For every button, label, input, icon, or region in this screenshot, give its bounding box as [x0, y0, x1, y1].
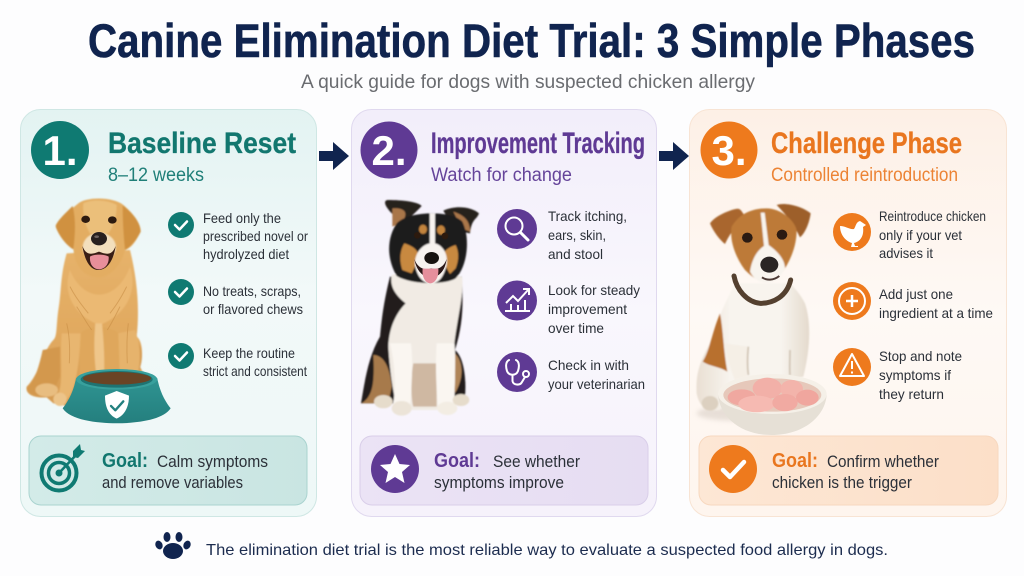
tracking item: check with veterinarian: your veterinarian	[548, 376, 645, 392]
tracking item: itching, ears, skin, stool	[497, 208, 627, 262]
icon: plus in ring	[839, 288, 865, 314]
icon: star badge	[371, 445, 419, 493]
panel: phase 3 challenge phase	[690, 110, 1006, 516]
tracking item: itching, ears, skin, stool: Track itching,	[548, 208, 627, 224]
tracking item: check with veterinarian: Check in with	[548, 357, 629, 373]
checklist item: feed only prescribed diet: Feed only the	[203, 210, 281, 226]
phase 1 number badge: 1.	[42, 127, 78, 174]
kibble bowl with shield	[63, 369, 171, 423]
checklist item: feed only prescribed diet	[168, 210, 308, 262]
arrow: phase 2 to 3	[659, 142, 689, 170]
phase 3 subheading: Controlled reintroduction	[771, 165, 958, 186]
tracking item: steady improvement: over time	[548, 320, 604, 336]
phase 2 heading: Improvement Tracking	[431, 127, 645, 160]
goal text: phase 1	[102, 450, 268, 492]
phase 2 subheading: Watch for change	[431, 165, 572, 186]
challenge item: one ingredient	[833, 282, 993, 321]
goal text: phase 1: and remove variables	[102, 474, 243, 492]
collar	[734, 276, 791, 303]
checklist item: no treats: or flavored chews	[203, 301, 303, 317]
tracking item: steady improvement	[497, 280, 640, 336]
challenge item: one ingredient: Add just one	[879, 286, 953, 302]
goal box: phase 2	[360, 436, 648, 505]
goal box: phase 3	[699, 436, 998, 505]
subtitle: A quick guide for dogs with suspected chicken allergy	[301, 71, 755, 93]
illustration: tricolor shepherd dog	[361, 200, 479, 416]
challenge item: reintroduce chicken	[833, 208, 986, 261]
tracking item: check with veterinarian	[497, 352, 645, 392]
checklist item: keep routine	[168, 343, 307, 379]
illustration: golden retriever	[26, 199, 171, 423]
goal text: phase 1: Calm symptoms	[157, 453, 268, 471]
checklist item: keep routine: Keep the routine	[203, 345, 295, 361]
challenge item: stop and note symptoms: symptoms if	[879, 367, 951, 383]
icon: target with arrow	[42, 444, 85, 490]
checklist item: feed only prescribed diet: hydrolyzed diet	[203, 246, 289, 262]
icon: rising chart	[505, 289, 530, 311]
challenge item: stop and note symptoms	[833, 348, 962, 402]
panel: phase 2 improvement tracking	[352, 110, 656, 516]
phase 2 number badge	[360, 122, 418, 178]
tracking item: itching, ears, skin, stool: ears, skin,	[548, 227, 606, 243]
phase 3 heading: Challenge Phase	[771, 127, 962, 160]
challenge item: stop and note symptoms: they return	[879, 386, 944, 402]
checklist item: no treats	[168, 279, 303, 317]
goal text: phase 3	[772, 450, 939, 492]
bowl of raw chicken	[718, 374, 827, 435]
challenge item: reintroduce chicken: Reintroduce chicken	[879, 208, 986, 224]
goal box: phase 1	[29, 436, 307, 505]
arrow: phase 1 to 2	[319, 142, 349, 170]
goal text: phase 3: Confirm whether	[827, 453, 939, 471]
goal text: phase 2: See whether	[493, 453, 580, 471]
checklist item: feed only prescribed diet: prescribed novel or	[203, 228, 308, 244]
goal text: phase 2: Goal:	[434, 450, 480, 472]
icon: warning triangle	[840, 354, 864, 376]
goal text: phase 1: Goal:	[102, 450, 148, 472]
icon: magnifier	[506, 218, 528, 240]
tracking item: steady improvement: Look for steady	[548, 282, 640, 298]
icon: check badge	[709, 445, 757, 493]
goal text: phase 2: symptoms improve	[434, 474, 564, 492]
phase 1 subheading: 8–12 weeks	[108, 165, 204, 186]
challenge item: one ingredient: ingredient at a time	[879, 305, 993, 321]
challenge item: reintroduce chicken: only if your vet	[879, 227, 962, 243]
icon: stethoscope	[506, 360, 529, 385]
phase 3 number badge	[700, 122, 758, 178]
goal text: phase 2	[434, 450, 580, 492]
goal text: phase 3: Goal:	[772, 450, 818, 472]
panel: phase 1 baseline reset	[20, 110, 316, 516]
phase 2 number badge: 2.	[371, 127, 407, 174]
challenge item: stop and note symptoms: Stop and note	[879, 348, 962, 364]
icon: chicken	[840, 221, 866, 247]
checklist item: keep routine: strict and consistent	[203, 363, 307, 379]
phase 1 number badge	[31, 121, 89, 179]
checklist item: no treats: No treats, scraps,	[203, 283, 301, 299]
illustration: jack russell terrier with raw chicken	[696, 204, 827, 435]
challenge item: reintroduce chicken: advises it	[879, 245, 933, 261]
tracking item: steady improvement: improvement	[548, 301, 627, 317]
goal text: phase 3: chicken is the trigger	[772, 474, 912, 492]
phase 3 number badge: 3.	[711, 127, 747, 174]
footer note: The elimination diet trial is the most reliable way to evaluate a suspected food allergy in dogs.	[206, 542, 888, 559]
phase 1 heading: Baseline Reset	[108, 127, 296, 160]
tracking item: itching, ears, skin, stool: and stool	[548, 246, 603, 262]
icon: paw print	[154, 532, 192, 559]
